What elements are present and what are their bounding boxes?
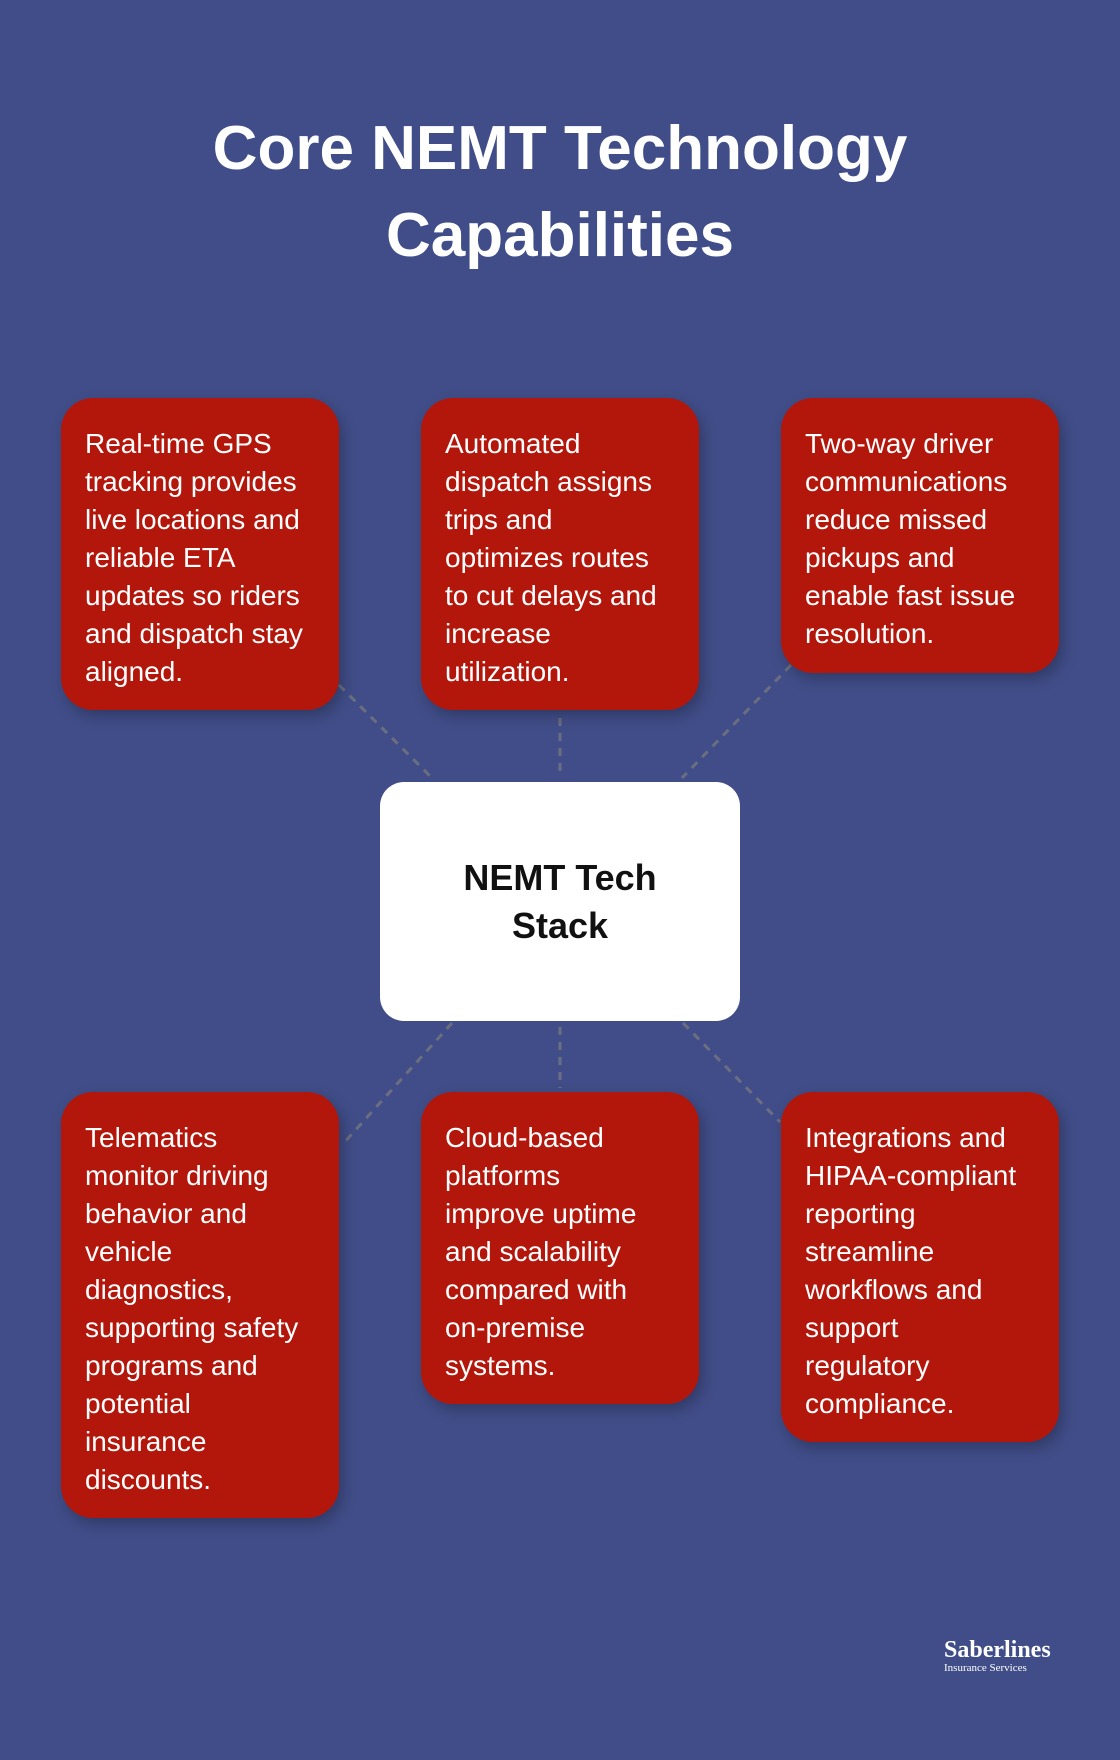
card: automated dispatch: increase bbox=[445, 618, 551, 649]
center box: NEMT Tech Stack: Stack bbox=[512, 904, 608, 946]
card: telematics bbox=[61, 1092, 339, 1518]
card: driver communications: communications bbox=[805, 466, 1007, 497]
card: driver communications: enable fast issue bbox=[805, 580, 1015, 611]
card: driver communications: Two-way driver bbox=[805, 428, 993, 459]
card: GPS tracking: aligned. bbox=[85, 656, 183, 687]
card: telematics: insurance bbox=[85, 1426, 206, 1457]
title: Capabilities bbox=[386, 201, 734, 270]
card: telematics: discounts. bbox=[85, 1464, 211, 1495]
card: integrations: support bbox=[805, 1312, 898, 1343]
card: automated dispatch: optimizes routes bbox=[445, 542, 649, 573]
card: automated dispatch: dispatch assigns bbox=[445, 466, 652, 497]
card: integrations: Integrations and bbox=[805, 1122, 1006, 1153]
card: automated dispatch: Automated bbox=[445, 428, 580, 459]
title bbox=[213, 114, 907, 270]
card: telematics: Telematics bbox=[85, 1122, 217, 1153]
card: integrations: HIPAA-compliant bbox=[805, 1160, 1016, 1191]
card: cloud platforms: Cloud-based bbox=[445, 1122, 604, 1153]
card: cloud platforms: platforms bbox=[445, 1160, 560, 1191]
card: cloud platforms: systems. bbox=[445, 1350, 555, 1381]
card: cloud platforms: and scalability bbox=[445, 1236, 621, 1267]
center box: NEMT Tech Stack bbox=[380, 782, 740, 1021]
card: automated dispatch: utilization. bbox=[445, 656, 570, 687]
card: integrations: compliance. bbox=[805, 1388, 954, 1419]
card: integrations: workflows and bbox=[805, 1274, 982, 1305]
card: telematics: diagnostics, bbox=[85, 1274, 233, 1305]
card: driver communications: resolution. bbox=[805, 618, 934, 649]
card: integrations: reporting bbox=[805, 1198, 916, 1229]
card: cloud platforms: compared with bbox=[445, 1274, 627, 1305]
card: driver communications bbox=[781, 398, 1059, 673]
card: integrations bbox=[781, 1092, 1059, 1442]
card: cloud platforms: improve uptime bbox=[445, 1198, 636, 1229]
card: GPS tracking bbox=[61, 398, 339, 710]
card: integrations: streamline bbox=[805, 1236, 934, 1267]
center box: NEMT Tech Stack: NEMT Tech bbox=[463, 856, 657, 898]
card: automated dispatch: to cut delays and bbox=[445, 580, 657, 611]
card: telematics: potential bbox=[85, 1388, 191, 1419]
card: cloud platforms bbox=[421, 1092, 699, 1404]
card: integrations: regulatory bbox=[805, 1350, 930, 1381]
card: driver communications: reduce missed bbox=[805, 504, 987, 535]
card: GPS tracking: and dispatch stay bbox=[85, 618, 303, 649]
card: automated dispatch bbox=[421, 398, 699, 710]
card: telematics: behavior and bbox=[85, 1198, 247, 1229]
card: driver communications: pickups and bbox=[805, 542, 954, 573]
card: telematics: programs and bbox=[85, 1350, 258, 1381]
card: GPS tracking: live locations and bbox=[85, 504, 300, 535]
card: GPS tracking: reliable ETA bbox=[85, 542, 235, 573]
logo: Saberlines bbox=[944, 1637, 1051, 1663]
card: GPS tracking: updates so riders bbox=[85, 580, 300, 611]
card: GPS tracking: Real-time GPS bbox=[85, 428, 272, 459]
logo: Insurance Services bbox=[944, 1662, 1027, 1674]
card: cloud platforms: on-premise bbox=[445, 1312, 585, 1343]
card: telematics: vehicle bbox=[85, 1236, 172, 1267]
title: Core NEMT Technology bbox=[213, 114, 907, 183]
card: telematics: supporting safety bbox=[85, 1312, 298, 1343]
card: telematics: monitor driving bbox=[85, 1160, 269, 1191]
card: GPS tracking: tracking provides bbox=[85, 466, 297, 497]
card: automated dispatch: trips and bbox=[445, 504, 552, 535]
